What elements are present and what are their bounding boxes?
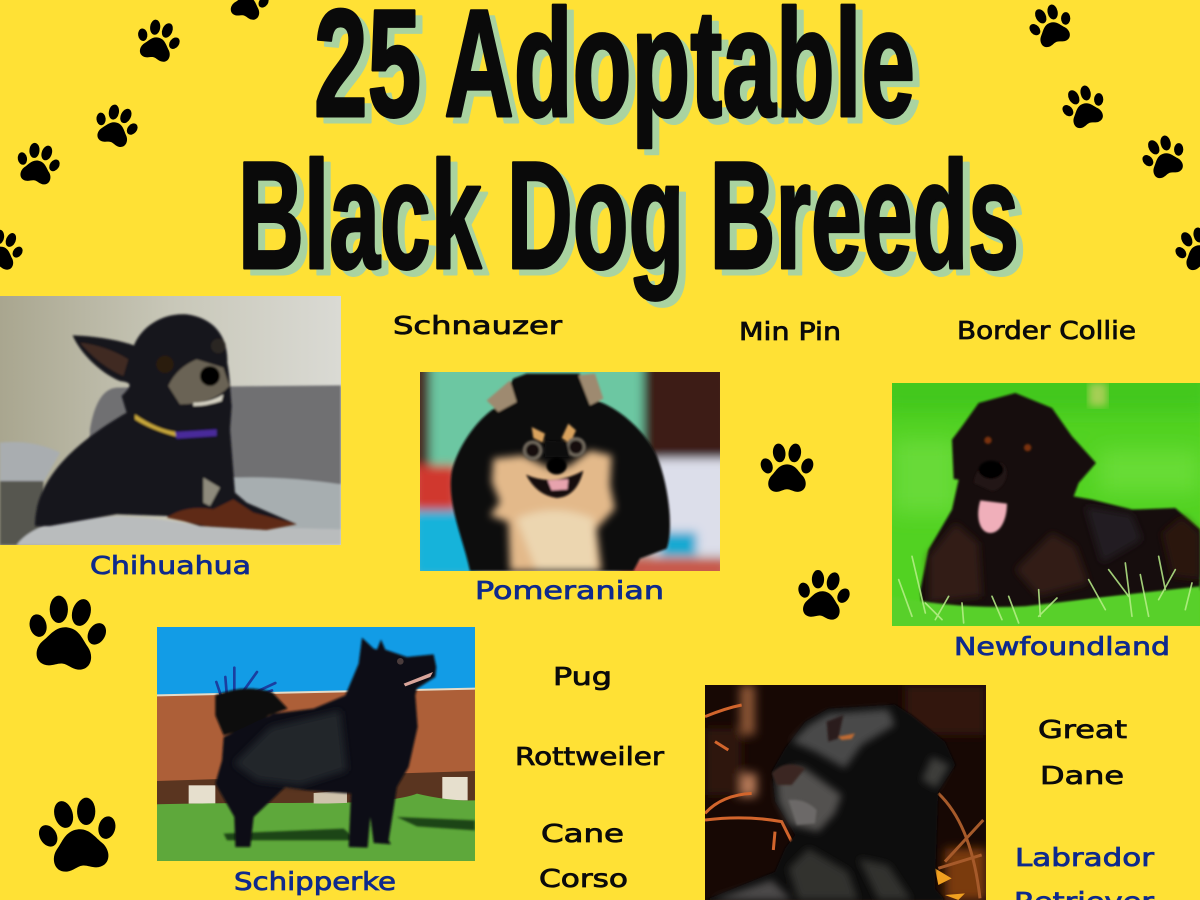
photo: Labrador [705,685,986,900]
photo: Chihuahua [0,296,341,545]
label: Min Pin: Min Pin [739,317,841,346]
label: Labrador Retriever [1014,843,1155,900]
label: Border Collie: Border Collie [957,316,1136,345]
tail tuft [216,668,275,699]
label: Newfoundland: Newfoundland [954,632,1170,661]
label: Pug: Pug [553,662,612,691]
photo: Schipperke [157,627,475,861]
label: Schipperke: Schipperke [234,867,396,896]
label: Cane Corso: Cane [541,819,624,848]
label: Rottweiler: Rottweiler [515,742,665,771]
label: Great Dane: Great [1038,715,1127,744]
label: Great Dane: Dane [1040,761,1124,790]
icon: paw left upper [21,590,113,673]
icon: paw left lower [32,792,124,875]
label: Labrador Retriever: Labrador [1015,843,1155,872]
icon: paw centre lower [793,567,855,622]
label: Chihuahua: Chihuahua [90,551,251,580]
photo: Newfoundland [879,370,1200,626]
photo: Pomeranian [420,372,720,571]
label: Schnauzer: Schnauzer [393,311,563,340]
title [238,0,1026,307]
decorative paw prints: top scatter [0,0,1200,275]
label: Cane Corso [539,819,628,893]
orange twigs [705,705,983,898]
grass blades [899,556,1192,623]
icon: paw centre upper [758,443,816,492]
label: Pomeranian: Pomeranian [475,576,664,605]
label: Great Dane [1038,715,1127,790]
label: Cane Corso: Corso [539,864,628,893]
